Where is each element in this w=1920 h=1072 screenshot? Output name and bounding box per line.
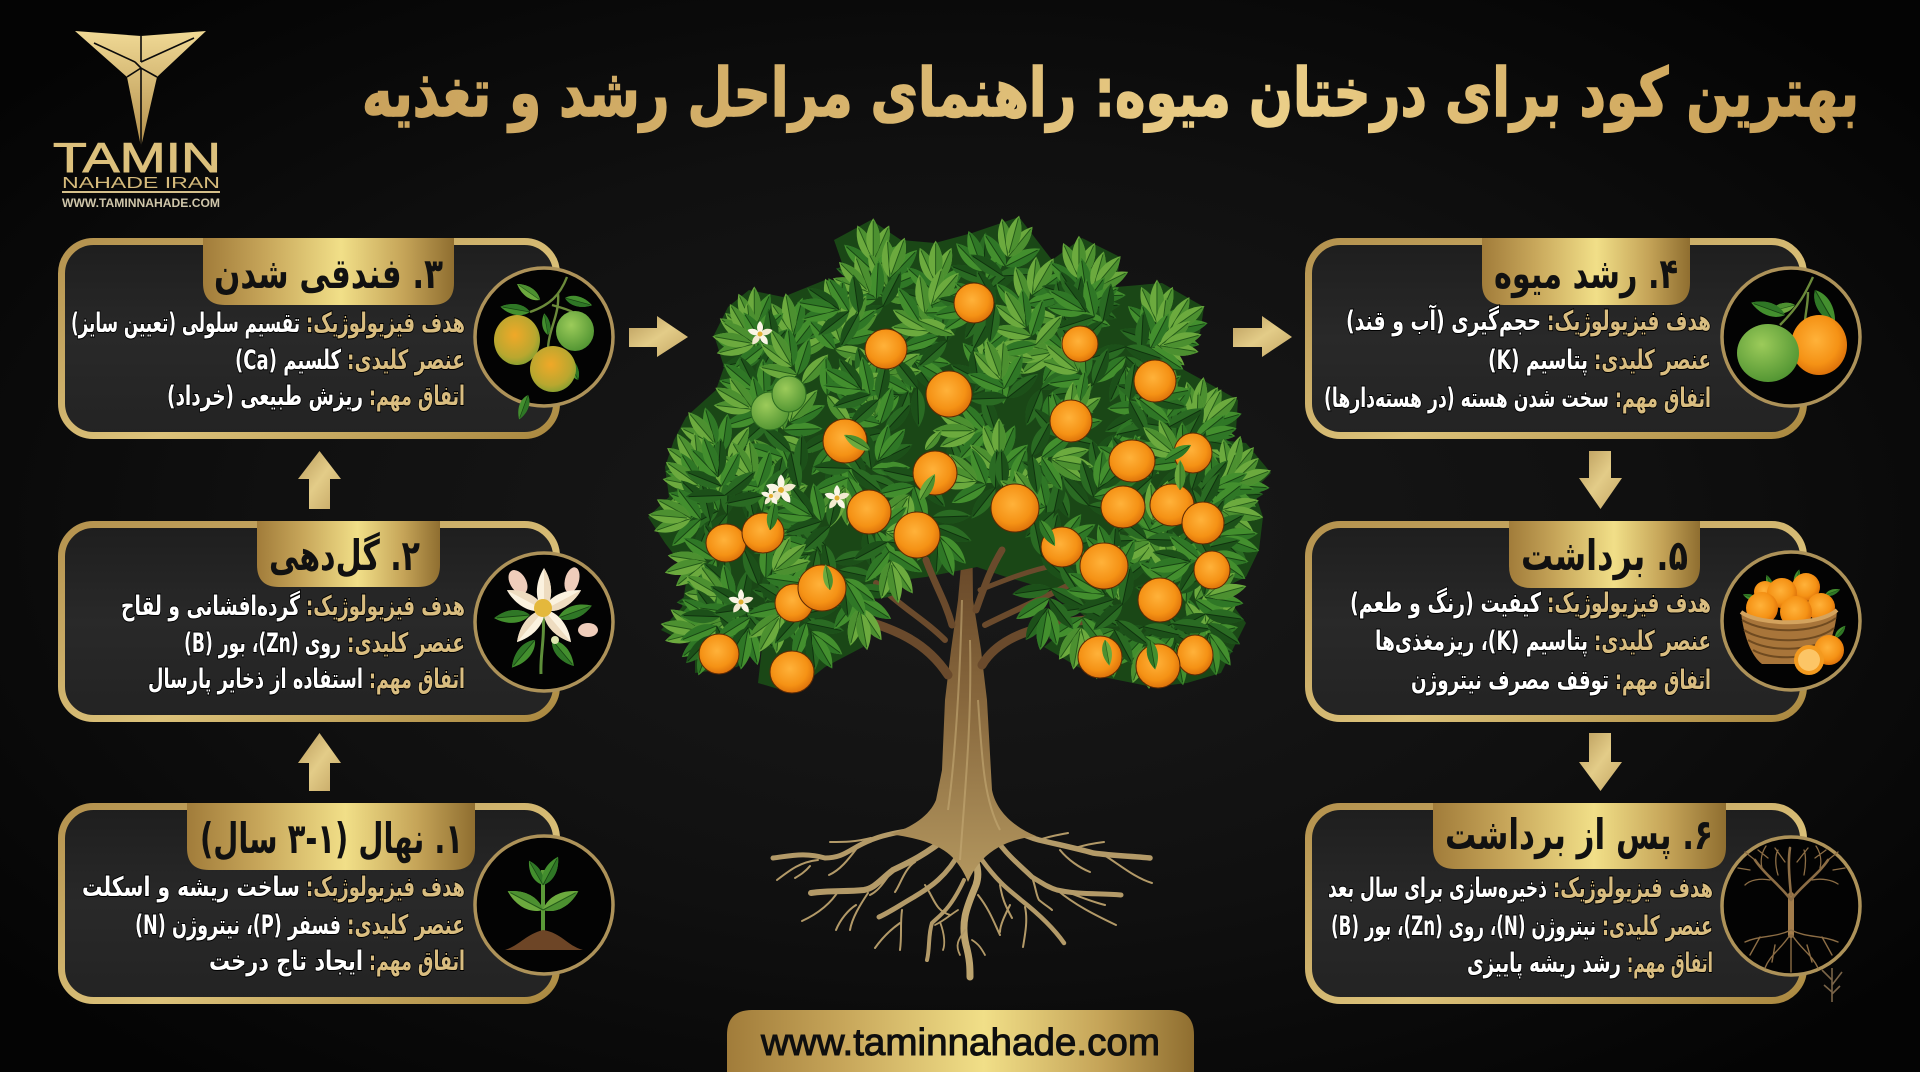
tree trunk — [890, 510, 1036, 882]
icon: seedling — [475, 836, 613, 974]
text block: stage 1 details: عنصر کلیدی: — [347, 910, 465, 941]
arrow: stage 2 to stage 3 — [298, 451, 341, 509]
text block: stage 3 details: اتفاق مهم: — [369, 381, 465, 412]
text block: stage 5 details: هدف فیزیولوژیک: — [1547, 588, 1711, 619]
panel: stage 3 fruit set — [62, 238, 613, 436]
text block: stage 1 details: فسفر (P)، نیتروژن (N) — [135, 910, 341, 941]
text block: stage 2 details: عنصر کلیدی: — [347, 628, 465, 659]
logo: Tamin Nahade Iran: TAMIN — [53, 134, 221, 181]
heading: stage 6 — [1433, 803, 1726, 869]
icon: young fruits — [475, 268, 613, 421]
tree foliage base — [648, 217, 1271, 693]
text block: stage 2 details: گرده‌افشانی و لقاح — [121, 590, 300, 622]
heading: stage 4: ۴. رشد میوه — [1494, 249, 1678, 299]
panel: stage 4 fruit growth — [1308, 238, 1860, 436]
icon: fruit basket — [1722, 552, 1860, 690]
heading: stage 4 — [1482, 238, 1690, 305]
logo: Tamin Nahade Iran — [53, 31, 221, 210]
text block: stage 6 details: نیتروژن (N)، روی (Zn)، بور (B) — [1331, 911, 1596, 942]
text block: stage 1 details: هدف فیزیولوژیک: — [306, 872, 465, 903]
text block: stage 4 details: عنصر کلیدی: — [1594, 345, 1711, 376]
text block: stage 6 details: ذخیره‌سازی برای سال بعد — [1328, 873, 1547, 904]
arrow: stage 1 to stage 2 — [298, 733, 341, 791]
text block: stage 3 details: کلسیم (Ca) — [235, 345, 341, 376]
heading: stage 3: ۳. فندقی شدن — [214, 249, 443, 298]
text block: stage 6 details: هدف فیزیولوژیک: — [1553, 873, 1713, 904]
text block: stage 5 details: عنصر کلیدی: — [1594, 626, 1711, 657]
heading: stage 6: ۶. پس از برداشت — [1445, 810, 1713, 860]
text block: stage 6 details: رشد ریشه پاییزی — [1467, 948, 1621, 979]
text block: stage 5 details: اتفاق مهم: — [1615, 665, 1711, 696]
text block: stage 3 details: ریزش طبیعی (خرداد) — [167, 381, 363, 412]
text block: stage 2 details: روی (Zn)، بور (B) — [184, 628, 341, 659]
text block: stage 2 details — [121, 590, 465, 695]
heading: stage 2: ۲. گل‌دهی — [269, 531, 420, 580]
text block: stage 5 details: توقف مصرف نیتروژن — [1411, 665, 1609, 696]
text block: stage 2 details: استفاده از ذخایر پارسال — [148, 664, 363, 695]
panel: stage 5 harvest — [1308, 521, 1860, 718]
text block: stage 1 details — [82, 872, 465, 977]
panel: stage 2 flowering — [62, 521, 613, 718]
text block: stage 5 details — [1350, 587, 1711, 696]
text block: stage 2 details: اتفاق مهم: — [369, 664, 465, 695]
text block: stage 3 details: هدف فیزیولوژیک: — [306, 308, 465, 339]
tree fruit — [699, 283, 1230, 693]
tree branches — [855, 550, 1086, 675]
heading: stage 1: ۱. نهال (۱‏-‏۳ سال) — [200, 814, 463, 864]
icon: blossom — [475, 553, 613, 691]
text block: stage 3 details: عنصر کلیدی: — [347, 345, 465, 376]
panel: stage 6 post harvest — [1308, 803, 1860, 1002]
footer: website badge — [727, 1010, 1194, 1072]
arrow: stage 3 to tree — [629, 316, 688, 357]
text block: stage 1 details: ساخت ریشه و اسکلت — [82, 872, 300, 903]
heading: stage 1 — [187, 803, 475, 870]
text block: stage 4 details: حجم‌گیری (آب و قند) — [1346, 304, 1541, 337]
text block: stage 6 details: عنصر کلیدی: — [1602, 911, 1713, 942]
logo: Tamin Nahade Iran: NAHADE IRAN — [62, 175, 220, 192]
text block: stage 1 details: اتفاق مهم: — [369, 946, 465, 977]
icon: growing fruit — [1722, 268, 1860, 406]
text block: stage 1 details: ایجاد تاج درخت — [209, 946, 363, 977]
heading: stage 3 — [203, 238, 454, 305]
text block: stage 2 details: هدف فیزیولوژیک: — [306, 591, 465, 622]
logo: Tamin Nahade Iran: WWW.TAMINNAHADE.COM — [62, 198, 220, 210]
text block: stage 4 details: اتفاق مهم: — [1615, 383, 1711, 414]
text block: stage 4 details: پتاسیم (K) — [1488, 345, 1588, 376]
text block: stage 4 details: هدف فیزیولوژیک: — [1547, 306, 1711, 337]
heading: stage 2 — [257, 521, 440, 587]
panel: stage 1 seedling — [62, 803, 613, 1000]
arrow: stage 5 to stage 6 — [1579, 733, 1622, 791]
text block: stage 6 details — [1328, 873, 1713, 979]
arrow: tree to stage 4 — [1233, 316, 1292, 357]
heading: stage 5 — [1509, 521, 1700, 588]
arrow: stage 4 to stage 5 — [1579, 451, 1622, 509]
text block: stage 6 details: اتفاق مهم: — [1627, 948, 1713, 979]
text block: stage 4 details — [1324, 304, 1711, 414]
icon: dormant tree and roots — [1722, 837, 1860, 1002]
text block: stage 4 details: سخت شدن هسته (در هسته‌دارها) — [1324, 383, 1609, 414]
tree roots — [773, 812, 1152, 977]
tree blossoms — [728, 321, 850, 614]
footer: website badge: www.taminnahade.com — [760, 1022, 1160, 1064]
tree leaves — [643, 205, 1284, 693]
illustration: orange tree — [643, 205, 1284, 977]
text block: stage 3 details: تقسیم سلولی (تعیین سایز) — [71, 308, 300, 339]
tree leaves over fruit — [765, 370, 1194, 670]
heading: stage 5: ۵. برداشت — [1521, 531, 1688, 581]
text block: stage 3 details — [71, 308, 465, 412]
text block: stage 5 details: کیفیت (رنگ و طعم) — [1350, 587, 1541, 619]
text block: stage 5 details: پتاسیم (K)، ریزمغذی‌ها — [1375, 626, 1588, 657]
